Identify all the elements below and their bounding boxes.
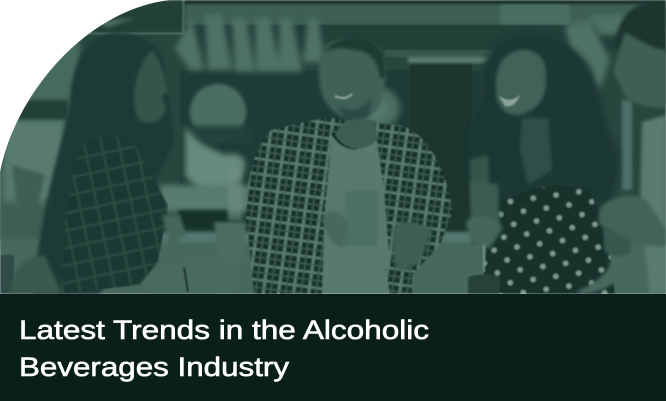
photo scene clipped to rounded corner — [0, 0, 666, 294]
person: woman with long hair, left — [10, 33, 241, 294]
top framed sign — [88, 0, 185, 35]
globe lamps and white blossom decor — [185, 84, 400, 192]
person: man in plaid shirt, center — [245, 37, 453, 294]
cocktail jar in woman's hand — [212, 172, 248, 241]
person: woman with curly hair and polka-dot dress — [466, 34, 633, 294]
hanging glasses — [175, 15, 325, 72]
softened scene contents — [0, 0, 666, 294]
title: Beverages Industry — [19, 352, 290, 382]
hanging leaves at right — [565, 15, 625, 88]
hero photo: friends at a bar with green duotone — [0, 0, 666, 294]
person: man at right edge holding beer — [598, 2, 666, 294]
title: Latest Trends in the Alcoholic — [19, 315, 429, 345]
bar background — [0, 0, 666, 294]
title band — [0, 294, 666, 401]
title — [19, 315, 429, 382]
left table glassware — [12, 165, 250, 228]
